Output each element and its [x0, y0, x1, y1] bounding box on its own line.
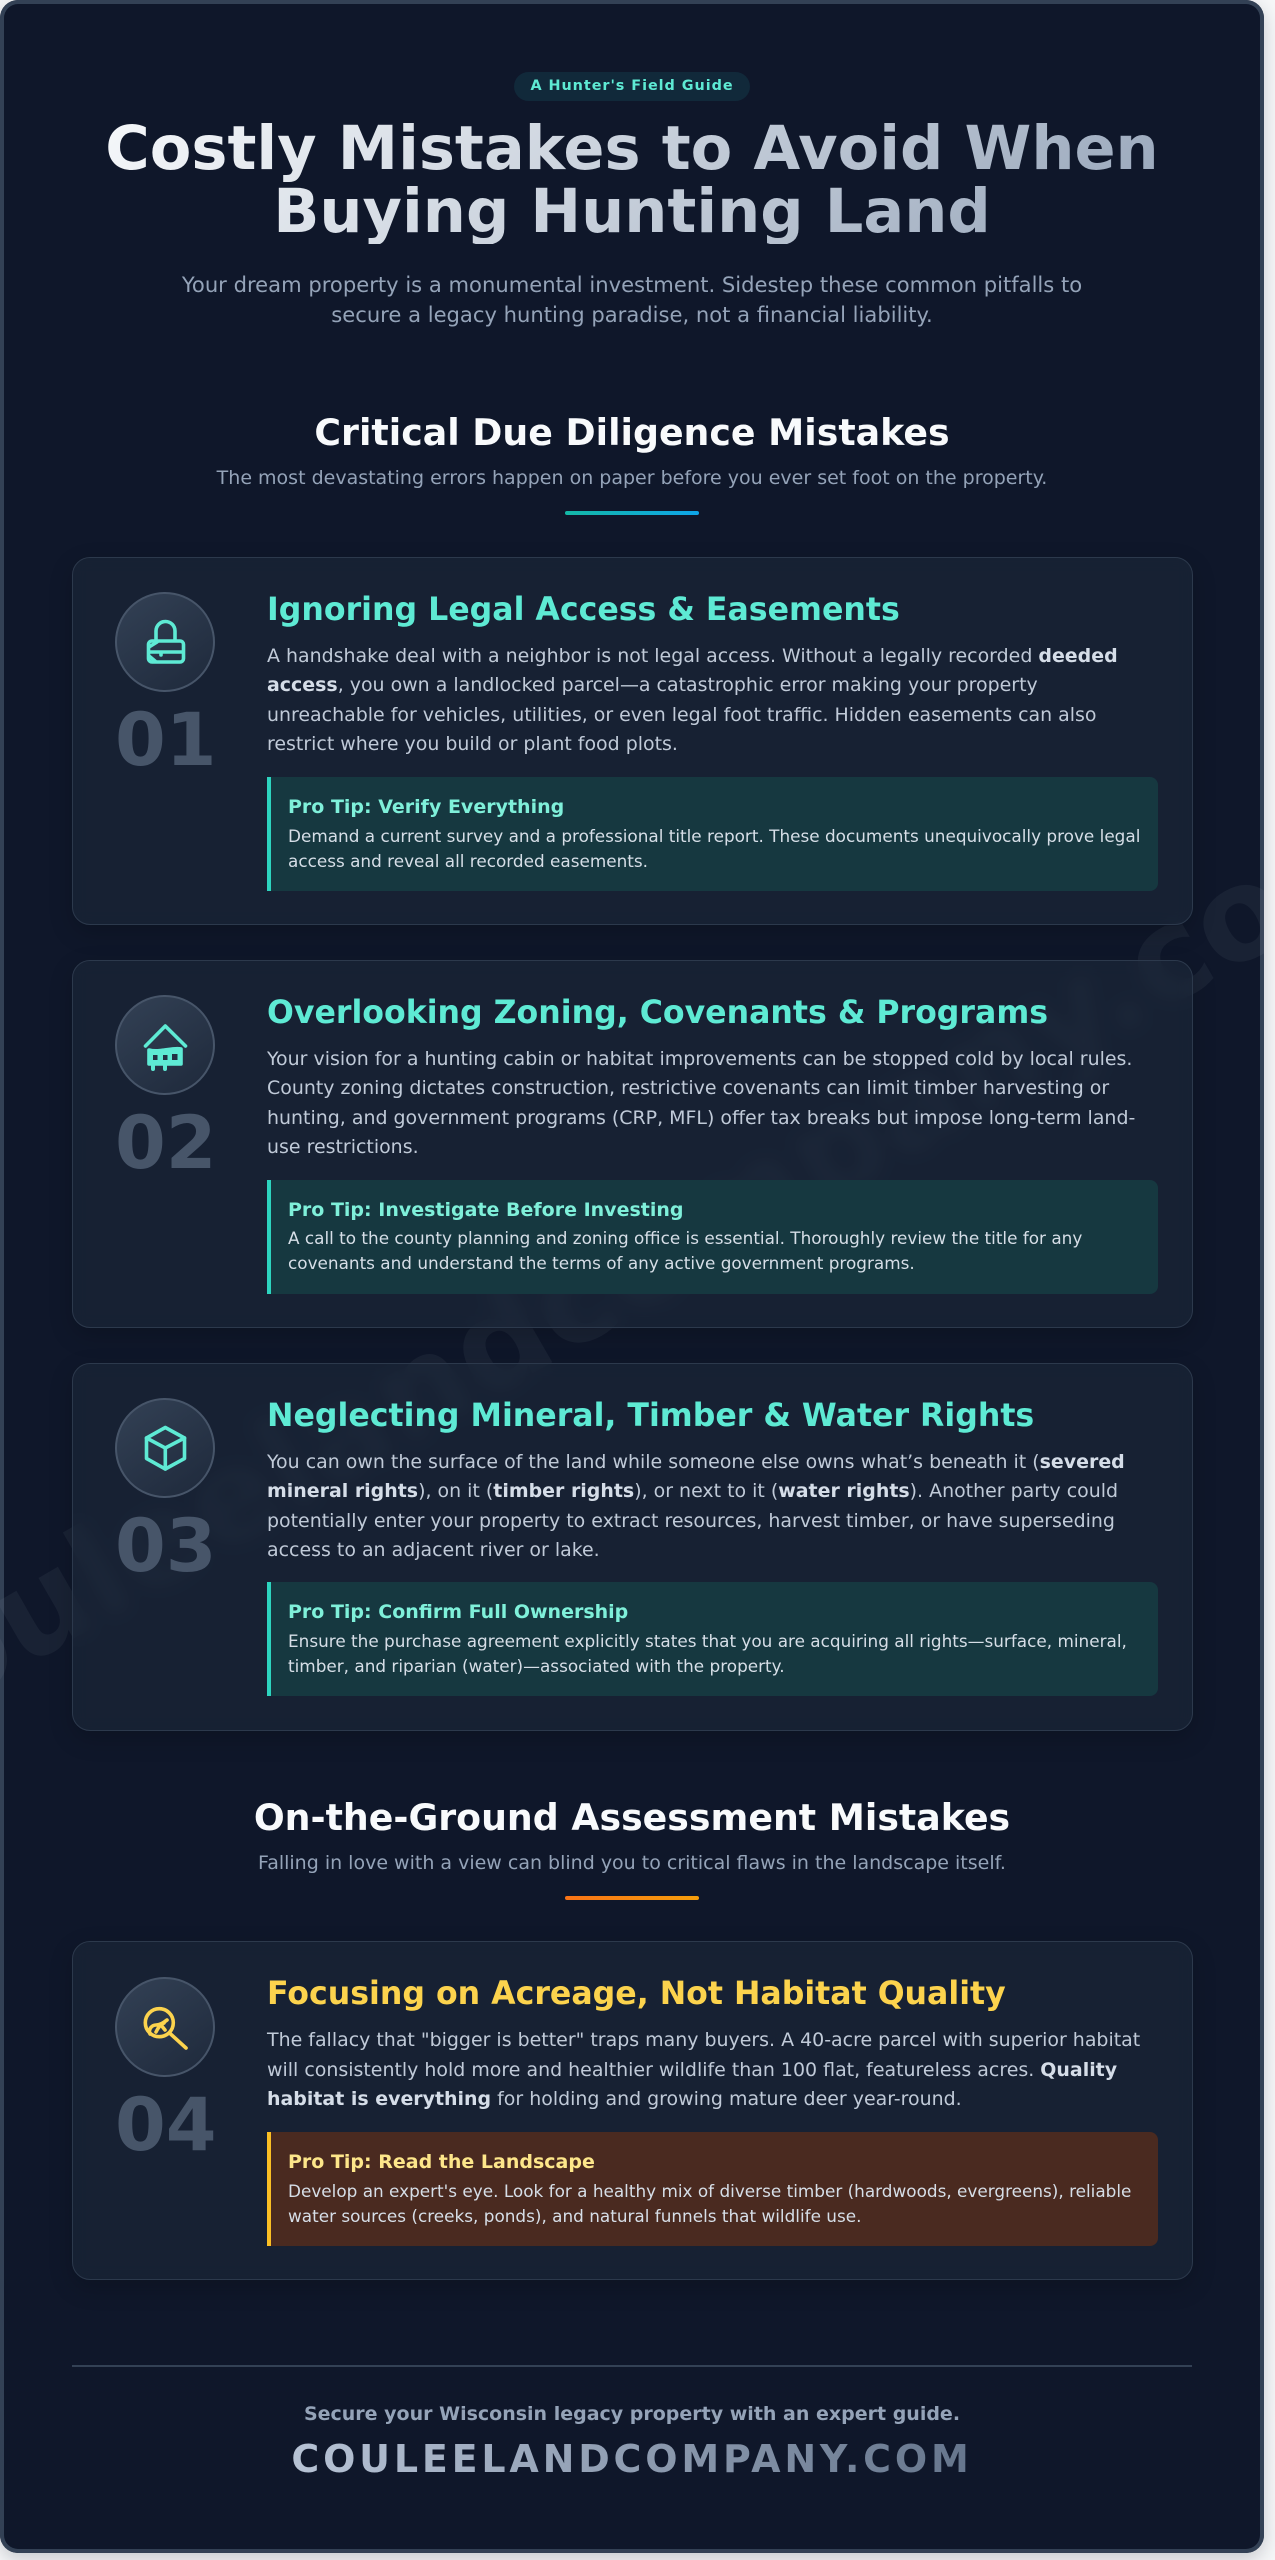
icon: magnifier: [115, 1976, 215, 2076]
badge: [514, 72, 750, 101]
footer rule: [72, 2365, 1192, 2367]
section subheading: due diligence: The most devastating errors happen on paper before you ever set foot on the property.: [217, 467, 1047, 489]
body text: hunting, and government programs (CRP, MFL) offer tax breaks but impose long-term land-: [267, 1107, 1135, 1129]
body text: County zoning dictates construction, restrictive covenants can limit timber harvesting or: [267, 1077, 1109, 1099]
body text: potentially enter your property to extract resources, harvest timber, or have superseding: [267, 1510, 1115, 1532]
pro tip: [267, 2132, 1158, 2246]
tip text: [288, 1228, 1082, 1273]
title: Buying Hunting Land: [273, 177, 991, 247]
body text: access to an adjacent river or lake.: [267, 1539, 600, 1561]
panel: mistake 03: [72, 1362, 1192, 1731]
body text: use restrictions.: [267, 1136, 419, 1158]
number 01: 01: [115, 698, 217, 783]
section accent bar: orange: [565, 1896, 699, 1900]
body text: mineral rights), on it (timber rights), or next to it (water rights). Another party could: [267, 1480, 1118, 1502]
section subheading: on the ground: Falling in love with a view can blind you to critical flaws in the landscape itself.: [258, 1852, 1006, 1874]
body text: The fallacy that "bigger is better" traps many buyers. A 40-acre parcel with superior habitat: [267, 2029, 1140, 2051]
body text: Your vision for a hunting cabin or habitat improvements can be stopped cold by local rules.: [267, 1048, 1132, 1070]
body text: habitat is everything for holding and growing mature deer year-round.: [267, 2088, 962, 2110]
body text: access, you own a landlocked parcel—a catastrophic error making your property: [267, 674, 1038, 696]
number 03: 03: [115, 1504, 217, 1589]
heading: Focusing on Acreage, Not Habitat Quality: [267, 1976, 1006, 2012]
pro tip: [267, 777, 1158, 891]
tip text: Develop an expert's eye. Look for a healthy mix of diverse timber (hardwoods, evergreens), reliable: [288, 2181, 1131, 2201]
heading: Neglecting Mineral, Timber & Water Rights: [267, 1398, 1034, 1434]
subtitle: Your dream property is a monumental investment. Sidestep these common pitfalls to: [182, 272, 1082, 297]
tip text: water sources (creeks, ponds), and natural funnels that wildlife use.: [288, 2206, 861, 2226]
tip text: [288, 1631, 1127, 1676]
section heading: on the ground: On-the-Ground Assessment Mistakes: [254, 1796, 1010, 1839]
number 04: 04: [115, 2082, 217, 2168]
body text: [267, 1048, 1135, 1158]
tip title: Pro Tip: Verify Everything: [288, 796, 564, 818]
section heading: due diligence: Critical Due Diligence Mistakes: [314, 411, 950, 454]
badge: A Hunter's Field Guide: [530, 78, 734, 94]
body text: You can own the surface of the land while someone else owns what’s beneath it (severed: [267, 1451, 1125, 1473]
tip text: covenants and understand the terms of any active government programs.: [288, 1253, 915, 1273]
subtitle: [182, 272, 1082, 326]
tip text: [288, 2181, 1131, 2226]
body text: [267, 1451, 1125, 1561]
icon: house: [115, 995, 215, 1095]
body text: will consistently hold more and healthier wildlife than 100 flat, featureless acres. Quality: [267, 2059, 1117, 2081]
number 02: 02: [115, 1101, 217, 1186]
footer domain: COULEELANDCOMPANY.COM: [291, 2436, 973, 2480]
heading: Ignoring Legal Access & Easements: [267, 592, 900, 628]
panel: mistake 01: [72, 556, 1192, 925]
subtitle: secure a legacy hunting paradise, not a financial liability.: [331, 302, 933, 326]
body text: A handshake deal with a neighbor is not legal access. Without a legally recorded deeded: [267, 645, 1118, 667]
body text: restrict where you build or plant food plots.: [267, 733, 678, 755]
icon: lock: [115, 592, 215, 692]
tip text: timber, and riparian (water)—associated with the property.: [288, 1656, 785, 1676]
section accent bar: teal: [565, 511, 699, 515]
tip text: Demand a current survey and a professional title report. These documents unequivocally prove legal: [288, 826, 1140, 846]
body text: [267, 645, 1118, 755]
pro tip: [267, 1582, 1158, 1696]
tip text: access and reveal all recorded easements.: [288, 851, 648, 871]
body text: unreachable for vehicles, utilities, or even legal foot traffic. Hidden easements can also: [267, 704, 1097, 726]
footer tagline: Secure your Wisconsin legacy property with an expert guide.: [304, 2403, 960, 2425]
heading: Overlooking Zoning, Covenants & Programs: [267, 994, 1048, 1030]
tip title: Pro Tip: Investigate Before Investing: [288, 1198, 683, 1220]
panel: mistake 02: [72, 960, 1192, 1328]
tip title: Pro Tip: Read the Landscape: [288, 2151, 595, 2173]
pro tip: [267, 1180, 1158, 1294]
tip text: Ensure the purchase agreement explicitly states that you are acquiring all rights—surface, mineral,: [288, 1631, 1127, 1651]
icon: cube: [115, 1398, 215, 1498]
title: [72, 118, 1192, 244]
tip text: A call to the county planning and zoning office is essential. Thoroughly review the title for any: [288, 1228, 1082, 1248]
body text: [266, 2029, 1140, 2110]
title: Costly Mistakes to Avoid When: [105, 114, 1159, 184]
tip title: Pro Tip: Confirm Full Ownership: [288, 1601, 628, 1623]
tip text: [288, 826, 1140, 871]
panel: mistake 04: [72, 1941, 1192, 2280]
